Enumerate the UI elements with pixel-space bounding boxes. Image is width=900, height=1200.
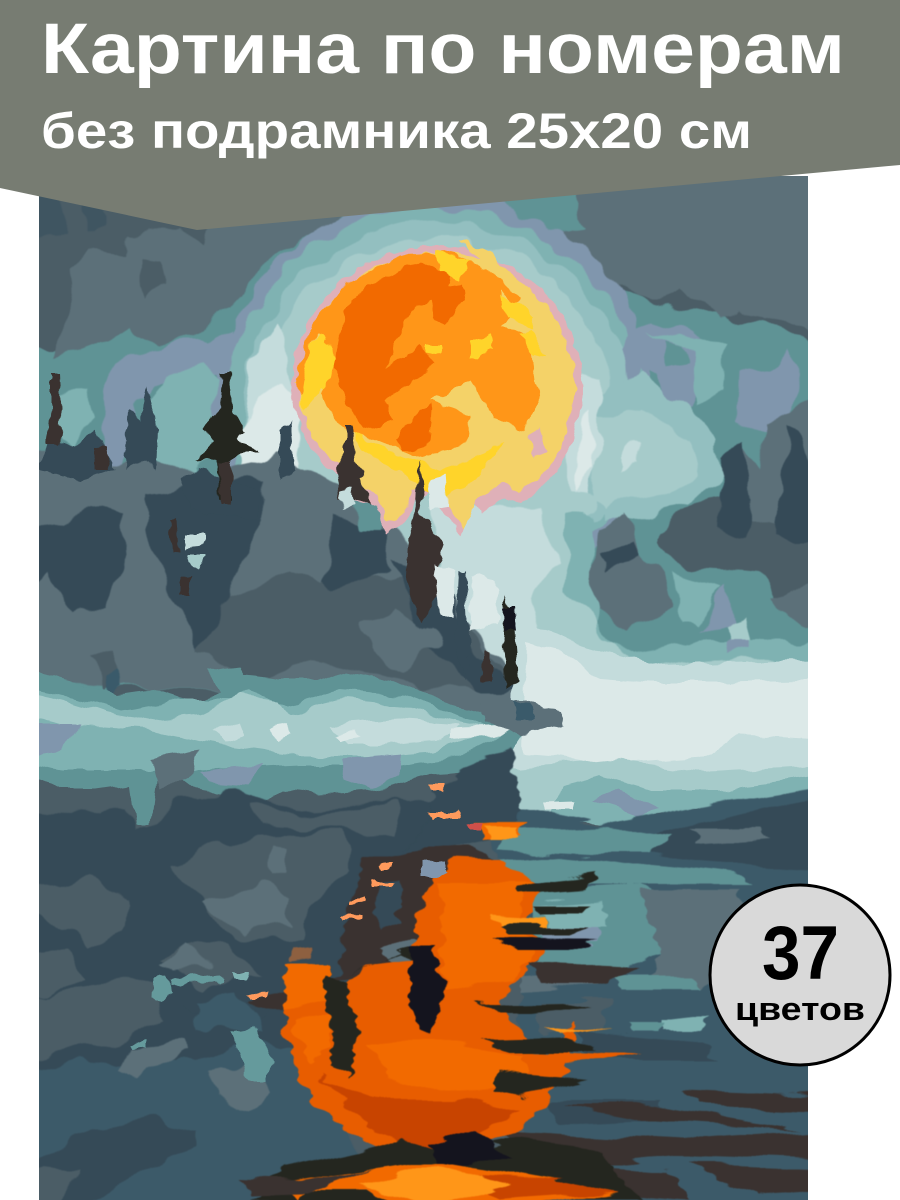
panel: painting of moon over forest and lake (20, 160, 830, 1200)
subtitle: без подрамника 25х20 см (41, 103, 752, 159)
moon reflection (240, 748, 640, 1200)
badge number: 37 (762, 911, 839, 996)
trees (39, 372, 565, 735)
moon (291, 240, 583, 535)
dark lake left (20, 795, 460, 1200)
badge label: цветов (735, 991, 865, 1027)
header banner (0, 0, 900, 230)
reflection highlights (245, 784, 482, 999)
light band on far shore (509, 628, 808, 826)
water right (491, 788, 808, 1200)
title: Картина по номерам (41, 10, 845, 89)
badge: number of colours (710, 885, 890, 1065)
forest mass (39, 450, 514, 712)
mist band (20, 665, 530, 825)
light spots on lake (130, 972, 272, 1080)
sky and moon glow (39, 176, 808, 693)
